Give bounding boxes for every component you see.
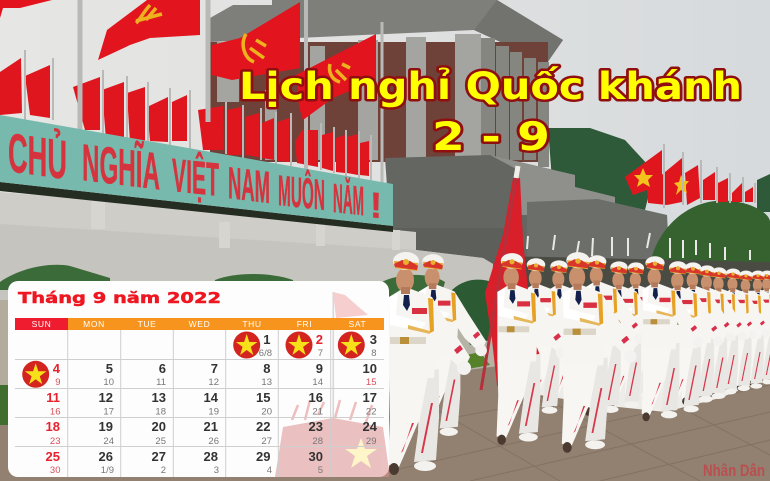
lunar dates: 1/9 bbox=[101, 465, 114, 476]
weekday header: THU bbox=[242, 319, 262, 329]
lunar dates: 29 bbox=[366, 436, 376, 447]
lunar dates: 28 bbox=[312, 436, 323, 447]
banner: CHỦ bbox=[8, 121, 67, 191]
lunar dates: 3 bbox=[214, 465, 219, 476]
flag poles bbox=[25, 0, 382, 183]
lunar dates: 16 bbox=[50, 406, 60, 418]
solar dates: 24 bbox=[363, 419, 378, 434]
lunar dates: 24 bbox=[103, 436, 114, 447]
mausoleum building bbox=[210, 0, 563, 167]
banner: VIỆT bbox=[172, 148, 219, 206]
banner: MUÔN bbox=[278, 166, 325, 220]
bayonets behind soldiers bbox=[527, 233, 750, 260]
red flags behind banner, left row bbox=[0, 58, 369, 176]
lunar dates: 26 bbox=[208, 436, 219, 447]
lunar dates: 20 bbox=[261, 406, 272, 418]
lunar dates: 12 bbox=[208, 377, 219, 388]
lunar dates: 2 bbox=[161, 465, 166, 476]
lunar dates: 10 bbox=[103, 377, 114, 388]
dark backdrop band behind soldiers bbox=[500, 256, 770, 300]
lunar dates bbox=[50, 348, 376, 476]
solar dates: 9 bbox=[316, 361, 323, 376]
lunar dates: 13 bbox=[261, 377, 272, 388]
solar dates: 19 bbox=[99, 419, 113, 434]
lunar dates: 8 bbox=[371, 348, 376, 359]
lunar dates: 30 bbox=[50, 465, 60, 476]
solar dates: 17 bbox=[363, 390, 377, 405]
calendar heading: Tháng 9 năm 2022 bbox=[18, 289, 221, 307]
banner: ! bbox=[370, 184, 382, 226]
solar dates: 5 bbox=[106, 361, 113, 376]
lunar dates: 22 bbox=[366, 406, 376, 418]
banner bbox=[0, 115, 393, 226]
honor guard soldiers bbox=[388, 166, 770, 475]
solar dates: 22 bbox=[256, 419, 270, 434]
calendar card bbox=[8, 281, 389, 477]
palm plants and hedges bbox=[0, 265, 492, 425]
weekday header bbox=[15, 318, 384, 330]
solar dates: 7 bbox=[211, 361, 218, 376]
large party flags with hammer and sickle bbox=[0, 0, 376, 120]
background tree behind mausoleum bbox=[548, 128, 770, 212]
solar dates: 27 bbox=[152, 449, 166, 464]
lunar dates: 11 bbox=[156, 377, 166, 388]
solar dates: 12 bbox=[99, 390, 113, 405]
bush at right bbox=[650, 201, 770, 268]
holiday star markers bbox=[22, 332, 365, 388]
solar dates: 2 bbox=[316, 332, 323, 347]
solar dates: 25 bbox=[46, 449, 60, 464]
parade ground bbox=[0, 338, 770, 481]
lunar dates: 18 bbox=[155, 406, 166, 418]
solar dates: 26 bbox=[99, 449, 113, 464]
solar dates bbox=[46, 332, 378, 464]
solar dates: 15 bbox=[256, 390, 270, 405]
right Vietnamese flags bbox=[625, 144, 755, 208]
mausoleum terrace stonework bbox=[385, 155, 670, 270]
banner: NĂM bbox=[333, 175, 364, 224]
faint watermark of flag and monument bbox=[275, 292, 389, 477]
banner: NAM bbox=[228, 157, 270, 213]
main title: Lịch nghỉ Quốc khánh bbox=[239, 65, 742, 108]
solar dates: 8 bbox=[263, 361, 270, 376]
weekday header: WED bbox=[189, 319, 210, 329]
solar dates: 1 bbox=[263, 332, 270, 347]
solar dates: 3 bbox=[370, 332, 377, 347]
solar dates: 4 bbox=[53, 361, 61, 376]
solar dates: 11 bbox=[46, 390, 60, 405]
solar dates: 21 bbox=[204, 419, 218, 434]
weekday header: SAT bbox=[349, 319, 366, 329]
solar dates: 28 bbox=[204, 449, 218, 464]
solar dates: 30 bbox=[309, 449, 323, 464]
solar dates: 14 bbox=[204, 390, 219, 405]
solar dates: 6 bbox=[159, 361, 166, 376]
weekday header: FRI bbox=[297, 319, 312, 329]
hedge strip under banner bbox=[0, 182, 393, 232]
solar dates: 23 bbox=[309, 419, 323, 434]
title date: 2 - 9 bbox=[432, 115, 550, 160]
weekday header: SUN bbox=[32, 319, 51, 329]
lunar dates: 21 bbox=[312, 406, 323, 418]
lunar dates: 9 bbox=[55, 377, 60, 388]
flag bearer's red flag bbox=[481, 166, 540, 400]
weekday header: MON bbox=[83, 319, 105, 329]
solar dates: 16 bbox=[309, 390, 323, 405]
white flanking wall and steps bbox=[0, 192, 520, 392]
weekday header: TUE bbox=[138, 319, 156, 329]
solar dates: 18 bbox=[46, 419, 60, 434]
lunar dates: 15 bbox=[366, 377, 376, 388]
solar dates: 13 bbox=[152, 390, 166, 405]
solar dates: 20 bbox=[152, 419, 166, 434]
lunar dates: 14 bbox=[312, 377, 323, 388]
lunar dates: 27 bbox=[261, 436, 272, 447]
lunar dates: 6/8 bbox=[259, 348, 272, 359]
lunar dates: 19 bbox=[208, 406, 219, 418]
lunar dates: 17 bbox=[103, 406, 114, 418]
lunar dates: 4 bbox=[267, 465, 272, 476]
lunar dates: 25 bbox=[155, 436, 166, 447]
lunar dates: 5 bbox=[318, 465, 323, 476]
banner: NGHĨA bbox=[82, 133, 160, 202]
lunar dates: 23 bbox=[50, 436, 60, 447]
lunar dates: 7 bbox=[318, 348, 323, 359]
solar dates: 10 bbox=[363, 361, 377, 376]
solar dates: 29 bbox=[256, 449, 270, 464]
